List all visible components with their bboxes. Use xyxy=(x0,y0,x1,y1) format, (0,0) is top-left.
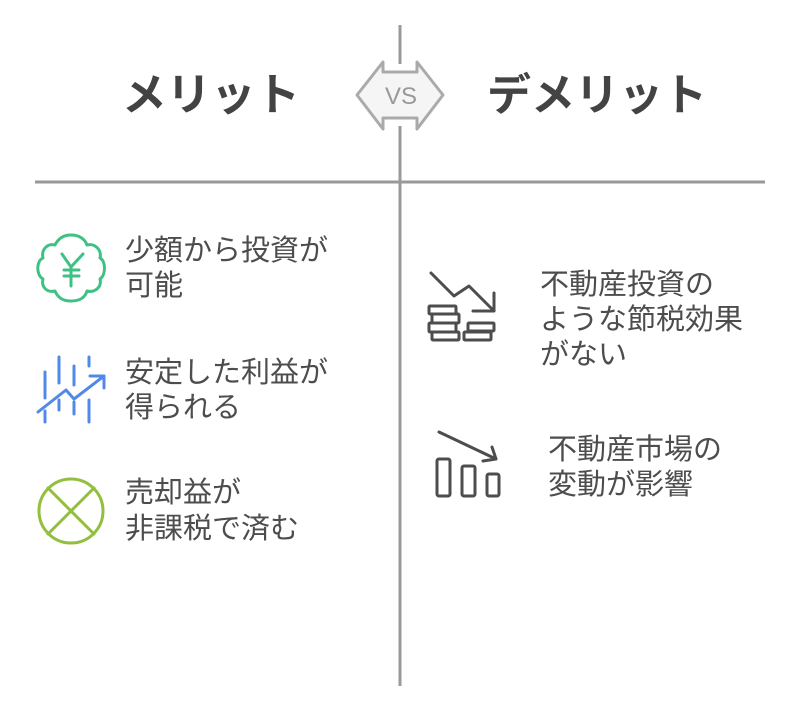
center divider line bottom xyxy=(398,126,402,686)
text: demerit 2: 不動産市場の xyxy=(548,433,722,466)
text: merit 1: 可能 xyxy=(125,269,183,302)
text: merit 3: 非課税で済む xyxy=(125,512,299,545)
text: demerit 1: 不動産投資の xyxy=(540,268,714,301)
heading: demerit: デメリット xyxy=(487,71,707,120)
horizontal divider xyxy=(35,180,765,184)
heading: merit: メリット xyxy=(122,71,300,120)
VS badge xyxy=(357,62,443,129)
text: merit 2: 安定した利益が xyxy=(125,356,328,389)
icon: falling coins xyxy=(429,273,494,340)
icon: yen flower xyxy=(38,235,104,301)
icon: falling bars xyxy=(437,432,499,496)
text: merit 1: 少額から投資が xyxy=(125,234,328,267)
text: demerit 1: がない xyxy=(540,338,627,371)
center divider line top xyxy=(398,25,402,64)
text: demerit 1: ような節税効果 xyxy=(540,303,743,336)
icon: crossed circle xyxy=(39,479,103,543)
text: demerit 2: 変動が影響 xyxy=(548,468,693,501)
text: merit 3: 売却益が xyxy=(125,476,241,509)
VS badge: VS xyxy=(385,83,417,110)
text: merit 2: 得られる xyxy=(125,391,241,424)
icon: rising chart xyxy=(38,357,104,422)
